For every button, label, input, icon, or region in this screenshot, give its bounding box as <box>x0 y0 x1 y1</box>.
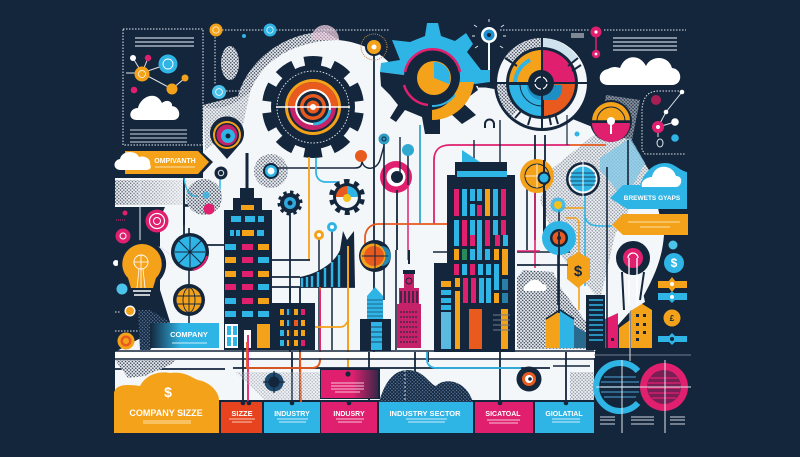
globes <box>171 228 209 325</box>
halftone circle with nodes <box>184 166 228 245</box>
company blue label <box>150 323 219 348</box>
blue red node <box>542 221 576 313</box>
orange ring node <box>520 159 554 240</box>
right icon column <box>658 240 687 345</box>
top dotted connector left <box>210 24 390 99</box>
box: industry pink <box>321 402 377 433</box>
lower red node <box>516 366 542 392</box>
box: global: GIOLATIAL <box>545 411 583 418</box>
box: sicatoal: SICATOAL <box>485 411 521 418</box>
halftone band top <box>203 32 340 108</box>
box: sicatoal <box>475 402 533 433</box>
halftone lower left <box>115 360 175 378</box>
orange medal <box>574 100 632 142</box>
hatched grey building <box>517 270 590 349</box>
box: industry blue <box>264 402 320 433</box>
area chart <box>300 222 355 372</box>
small cloud on hatch <box>524 280 547 291</box>
radial chart <box>494 35 590 131</box>
chart captions <box>600 417 685 424</box>
halftone lower right <box>570 372 594 400</box>
halftone right wash <box>540 95 650 300</box>
blue ribbon <box>610 163 687 209</box>
cloud top right <box>600 57 680 85</box>
top right dotted line and lines <box>500 26 686 58</box>
small windowed building <box>272 303 315 350</box>
halftone strip lower mid <box>235 372 320 400</box>
blue C chart <box>596 363 639 411</box>
hexagon dollar: $ <box>574 263 583 280</box>
company blue label: COMPANY <box>170 330 208 339</box>
light bulb <box>113 240 170 298</box>
pink tower <box>397 250 421 348</box>
location pin <box>210 116 244 159</box>
halftone fade on grey box <box>115 180 203 205</box>
central right nodes <box>517 140 628 350</box>
pink circle chart <box>640 363 688 411</box>
orange ribbon <box>612 214 688 235</box>
box: industry blue: INDUSTRY <box>274 411 310 418</box>
arch icon <box>485 120 494 128</box>
halftone grey box <box>115 180 203 205</box>
company size cloud box <box>114 372 219 433</box>
pink horizontal connector <box>434 145 606 224</box>
company size cloud box: COMPANY SIZZE <box>129 408 203 418</box>
halftone blob top <box>311 25 339 40</box>
dark striped building <box>586 295 605 350</box>
orange blue house <box>546 309 588 348</box>
banner: orange left <box>114 149 213 177</box>
small gear multicolor <box>332 182 362 212</box>
panel: top left dotted card <box>123 29 203 145</box>
banner: orange left: OMPIVANTH <box>154 158 196 165</box>
small nodes left bottom <box>115 306 170 350</box>
vertical colored links <box>309 115 567 260</box>
box: size <box>221 402 262 433</box>
box: industry sector: INDUSTRY SECTOR <box>389 409 461 418</box>
box: size: SIZZE <box>231 409 253 418</box>
blue node with rays <box>472 19 506 70</box>
pink note card <box>320 368 380 399</box>
left skyscraper <box>224 153 272 350</box>
hub with dark link <box>254 134 390 188</box>
baseline <box>115 351 691 359</box>
blue gear with pie <box>380 23 495 134</box>
small blue gear <box>279 192 301 300</box>
pink big node <box>380 144 414 260</box>
chart crosshair lines <box>596 310 691 433</box>
small target node lower <box>263 371 285 393</box>
orange and pink right buildings <box>605 297 652 348</box>
halftone wedge left <box>203 92 250 150</box>
orange node with halo <box>361 34 387 352</box>
lower links <box>114 335 590 402</box>
hexagon dollar <box>567 252 590 288</box>
pink node with tube <box>616 241 650 310</box>
dark gear with target <box>268 62 358 152</box>
orange crosshair node <box>359 240 391 272</box>
blue ribbon: BREWETS GYAPS <box>624 195 681 202</box>
light blue triangle <box>600 138 645 200</box>
box: industry pink: INDUSRY <box>333 411 365 418</box>
right icon column: £ <box>670 314 675 323</box>
tall center building <box>434 150 515 352</box>
blue ring node <box>566 160 600 200</box>
house link top <box>517 264 568 266</box>
mid link lines <box>245 144 447 368</box>
yellow small node <box>550 198 566 258</box>
panel: right dotted network <box>642 90 685 154</box>
blue tower <box>360 287 391 351</box>
dark hatched clouds <box>379 370 473 402</box>
box: global <box>535 402 594 433</box>
pink targets on left <box>116 180 168 244</box>
right icon column: $ <box>671 256 678 270</box>
box: industry sector <box>379 370 473 433</box>
white central field <box>115 40 664 400</box>
company size cloud box: $ <box>164 384 172 400</box>
box connector dots <box>241 401 568 405</box>
